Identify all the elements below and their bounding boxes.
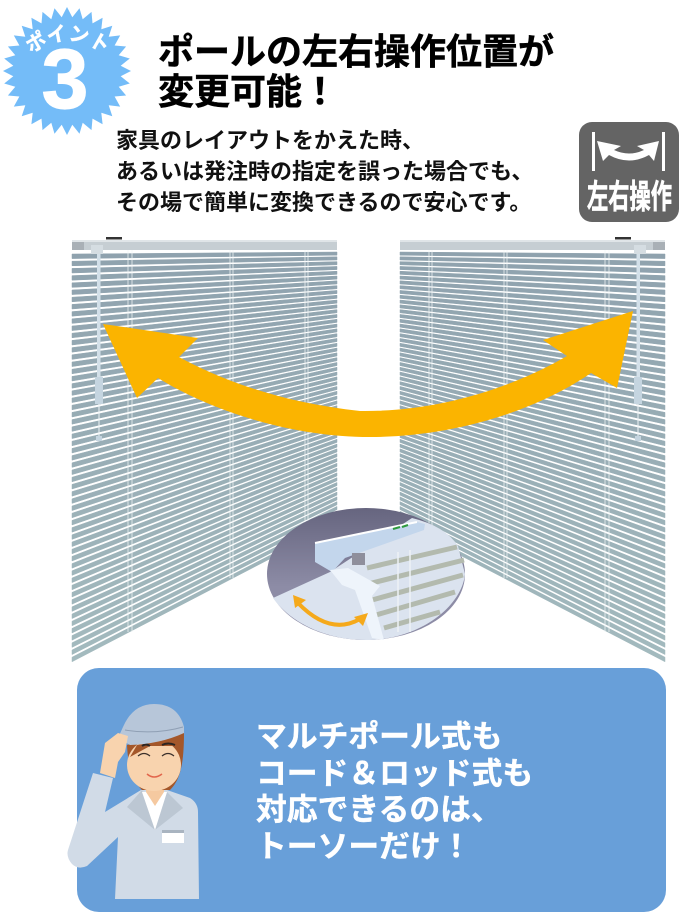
orange double arrow (103, 311, 633, 437)
message text: 対応できるのは、 (256, 792, 502, 827)
body text (116, 128, 533, 215)
body text: 家具のレイアウトをかえた時、 (116, 128, 424, 153)
badge: ポイント3 starburst (3, 7, 131, 135)
message text: マルチポール式も (256, 719, 502, 754)
right blind (400, 237, 665, 662)
message text (256, 719, 533, 864)
left blind (72, 237, 337, 662)
panel: blue message (77, 668, 666, 912)
character: worker saluting (68, 704, 199, 899)
small orange arrow (293, 595, 368, 626)
badge: ポイント3 starburst: ポイント (26, 24, 107, 52)
icon: left-right operation (579, 122, 679, 222)
body text: その場で簡単に変換できるので安心です。 (116, 190, 531, 215)
title: 変更可能！ (158, 71, 338, 112)
badge: ポイント3 starburst: 3 (42, 32, 88, 126)
message text: コード＆ロッド式も (256, 756, 533, 790)
body text: あるいは発注時の指定を誤った場合でも、 (116, 159, 533, 184)
inset: close-up of the pole mechanism (267, 508, 465, 640)
title: ポールの左右操作位置が (158, 31, 554, 72)
message text: トーソーだけ！ (256, 828, 472, 864)
title (158, 31, 554, 112)
